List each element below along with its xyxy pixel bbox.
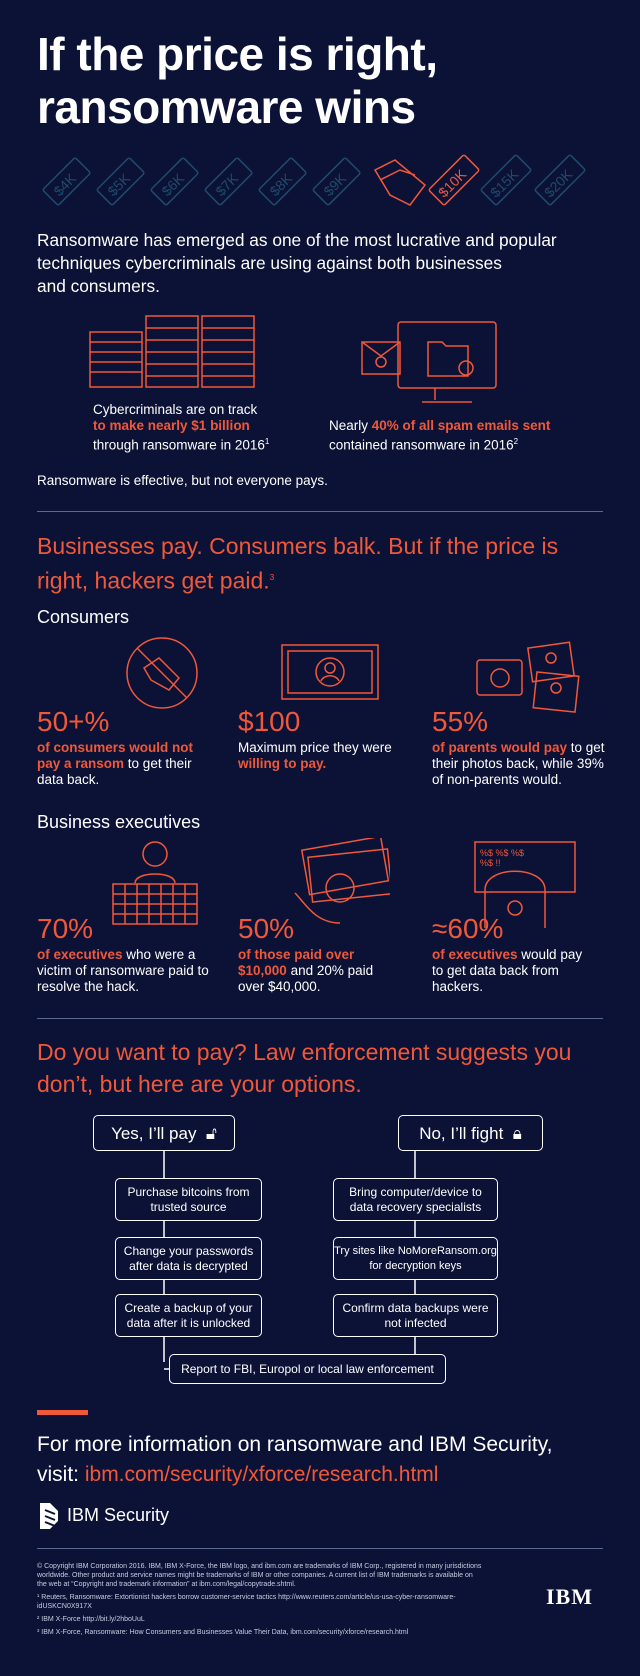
- heading: business executives: Business executives: [37, 812, 200, 832]
- more info text: [37, 1433, 552, 1486]
- footer legal text: ¹ Reuters, Ransomware: Extortionist hackers borrow customer-service tactics http://www.reuters.com/article/us-usa-cyber-ransomware-idUSKCN0X917X: [37, 1594, 456, 1610]
- no box: [398, 1115, 543, 1151]
- right step 2: [333, 1237, 498, 1280]
- price tags row: $9K: [320, 170, 350, 199]
- note: Ransomware is effective, but not everyone pays.: [37, 473, 328, 488]
- stat: 70% executives: 70%: [37, 913, 93, 944]
- title: If the price is right,: [37, 28, 438, 80]
- left step 3: data after it is unlocked: [127, 1316, 250, 1330]
- title: ransomware wins: [37, 81, 416, 133]
- stat: 60% executives: [432, 913, 582, 994]
- icon: computer with email: [361, 321, 497, 403]
- report box: Report to FBI, Europol or local law enforcement: [181, 1362, 434, 1376]
- accent bar: [37, 1410, 88, 1415]
- right step 2: Try sites like NoMoreRansom.org: [334, 1244, 497, 1256]
- right step 1: [333, 1178, 498, 1221]
- flowchart: [93, 1115, 543, 1384]
- price tags row: [42, 154, 586, 206]
- section heading: businesses pay: Businesses pay. Consumers balk. But if the price is right, hackers get paid.3: [37, 533, 558, 594]
- section heading: options: Do you want to pay? Law enforcement suggests you don’t, but here are your options.: [37, 1039, 571, 1097]
- price tags row: $15K: [487, 166, 522, 201]
- icon: no handshake: [126, 637, 198, 709]
- yes box: [93, 1115, 235, 1151]
- stat: 50+% consumers: 50+%: [37, 706, 109, 737]
- stat: 70% executives: [37, 913, 209, 994]
- price tags row: $20K: [541, 166, 576, 201]
- right step 3: [333, 1294, 498, 1337]
- right step 3: not infected: [384, 1316, 447, 1330]
- yes box: Yes, I’ll pay 🔓︎: [111, 1124, 217, 1142]
- stat: $100: [238, 706, 392, 771]
- logo: IBM Security: IBM Security: [67, 1504, 169, 1524]
- icon: executive with briefcase: [112, 841, 198, 925]
- price tags row: $5K: [104, 170, 134, 199]
- stat: 60% executives: of executives would pay to get data back from hackers.: [432, 947, 582, 994]
- icon: money stacks: [89, 315, 255, 388]
- stat: 55% parents: 55%: [432, 706, 488, 737]
- left step 1: trusted source: [150, 1200, 227, 1214]
- price tags row: $4K: [50, 170, 80, 199]
- stat: 55% parents: of parents would pay to get their photos back, while 39% of non-parents would.: [432, 740, 605, 787]
- intro text: and consumers.: [37, 276, 160, 296]
- stat: $100: $100: [238, 706, 300, 737]
- price tags row: $8K: [266, 170, 296, 199]
- stat: 70% executives: of executives who were a victim of ransomware paid to resolve the hack.: [37, 947, 209, 994]
- price tags row: $7K: [212, 170, 242, 199]
- more info text: For more information on ransomware and IBM Security,: [37, 1433, 552, 1456]
- stat: 50% paid over: 50%: [238, 913, 294, 944]
- intro text: Ransomware has emerged as one of the most lucrative and popular: [37, 230, 557, 250]
- left step 3: Create a backup of your: [124, 1300, 253, 1314]
- stat: $100: Maximum price they were willing to pay.: [238, 740, 392, 771]
- left step 1: [115, 1178, 262, 1221]
- icon: camera and photos: [476, 641, 580, 713]
- right step 2: for decryption keys: [369, 1260, 462, 1272]
- intro text: [37, 230, 557, 296]
- right step 1: data recovery specialists: [350, 1200, 481, 1214]
- stat: 50+% consumers: of consumers would not pay a ransom to get their data back.: [37, 740, 193, 787]
- footer legal text: © Copyright IBM Corporation 2016. IBM, IBM X-Force, the IBM logo, and ibm.com are trademarks of IBM Corp., registered in many jurisdictions worldwide. Other product and service names might be trademarks of IBM or other companies. A current list of IBM trademarks is available on the web at “Copyright and trademark information” at ibm.com/legal/copytrade.shtml.: [37, 1563, 481, 1588]
- stat: 50% paid over: of those paid over $10,000 and 20% paid over $40,000.: [238, 947, 373, 994]
- left step 1: Purchase bitcoins from: [127, 1184, 250, 1198]
- title: [37, 28, 438, 133]
- no box: No, I’ll fight 🔒︎: [419, 1124, 522, 1142]
- more info text: visit: ibm.com/security/xforce/research.html: [37, 1463, 438, 1486]
- icon: hacker: [474, 841, 576, 928]
- footer legal text: [37, 1562, 482, 1636]
- stat: 50% paid over: [238, 913, 373, 994]
- right step 1: Bring computer/device to: [349, 1184, 482, 1198]
- left step 2: [115, 1237, 262, 1280]
- icon: hacker: %$ %$ %$: [480, 848, 524, 858]
- left step 2: after data is decrypted: [129, 1258, 248, 1272]
- stat: 50+% consumers: [37, 706, 193, 787]
- left step 3: [115, 1294, 262, 1337]
- icon: hacker: %$ !!: [480, 858, 501, 868]
- stat: 60% executives: ≈60%: [432, 913, 503, 944]
- logo: IBM Security: [40, 1503, 169, 1529]
- right step 3: Confirm data backups were: [342, 1300, 489, 1314]
- logo: IBM: IBM: [546, 1584, 593, 1609]
- price tags row: $6K: [158, 170, 188, 199]
- stat: $1 billion: Cybercriminals are on track to make nearly $1 billion through ransomware in 20161: [93, 402, 269, 452]
- price tags row: $10K: [435, 166, 470, 201]
- heading: consumers: Consumers: [37, 607, 129, 627]
- stat: 40% spam: Nearly 40% of all spam emails sent contained ransomware in 20162: [329, 418, 550, 452]
- footer legal text: ³ IBM X-Force, Ransomware: How Consumers and Businesses Value Their Data, ibm.com/security/xforce/research.html: [37, 1629, 408, 1636]
- stat: 55% parents: [432, 706, 605, 787]
- icon: hand with money: [294, 838, 390, 924]
- footer legal text: ² IBM X-Force http://bit.ly/2hboUuL: [37, 1616, 145, 1623]
- report box: [169, 1354, 446, 1384]
- icon: bill: [281, 644, 379, 700]
- intro text: techniques cybercriminals are using against both businesses: [37, 253, 502, 273]
- left step 2: Change your passwords: [124, 1244, 253, 1258]
